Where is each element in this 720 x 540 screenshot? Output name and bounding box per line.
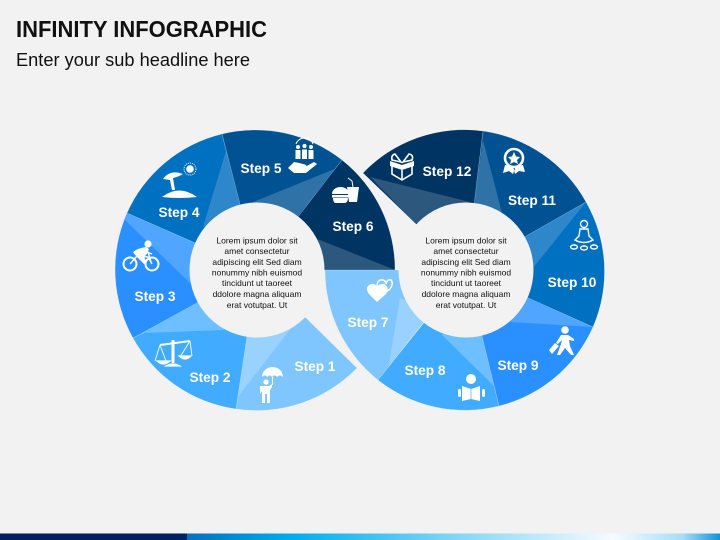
- segment: step 9: [466, 270, 593, 406]
- left ring segments: [115, 130, 395, 411]
- icon: people in hand: [288, 138, 317, 173]
- subtitle: Enter your sub headline here: [16, 50, 250, 70]
- segment: step 11: [466, 131, 586, 270]
- segment: step 1: [236, 270, 357, 411]
- segment: step 2: [133, 270, 257, 409]
- icon: umbrella person: [260, 367, 283, 403]
- segment: step 4: [127, 134, 257, 270]
- left body text: ddolore magna aliquam: [213, 289, 301, 299]
- left body text: [212, 236, 302, 310]
- step labels: Step 7: [347, 315, 389, 330]
- step labels: [134, 161, 597, 385]
- right body text: adipiscing elit Sed diam: [421, 257, 511, 267]
- icon: reader: [458, 374, 485, 401]
- left body text: adipiscing elit Sed diam: [212, 257, 302, 267]
- step labels: Step 5: [240, 161, 282, 176]
- right body text: tincidunt ut taoreet: [431, 278, 502, 288]
- step labels: Step 2: [189, 370, 231, 385]
- step labels: Step 6: [332, 219, 374, 234]
- title: INFINITY INFOGRAPHIC: [16, 16, 267, 42]
- segment: step 7: [325, 270, 466, 380]
- step labels: Step 9: [497, 358, 539, 373]
- step labels: Step 3: [134, 289, 176, 304]
- step labels: Step 8: [404, 363, 446, 378]
- step labels: Step 10: [548, 275, 597, 290]
- step labels: Step 1: [294, 359, 336, 374]
- icon: hearts: [367, 280, 392, 302]
- left body text: Lorem ipsum dolor sit: [216, 236, 298, 246]
- left body text: tincidunt ut taoreet: [222, 278, 293, 288]
- step labels: Step 11: [508, 193, 556, 208]
- right body text: Lorem ipsum dolor sit: [425, 236, 507, 246]
- step labels: Step 4: [158, 205, 200, 220]
- segment: step 10: [466, 202, 604, 327]
- icon: scales: [155, 340, 192, 366]
- icon: beach: [162, 163, 197, 198]
- right body text: erat votutpat. Ut: [436, 300, 497, 310]
- right ring segments: [325, 130, 604, 410]
- left body text: nonummy nibh euismod: [212, 268, 302, 278]
- right body text: amet consectetur: [433, 246, 499, 256]
- bottom bar: navy: [0, 534, 187, 540]
- right body text: [421, 236, 511, 310]
- icon: gift box: [390, 154, 414, 180]
- segment: step 5: [222, 130, 342, 270]
- segment: step 6: [257, 160, 395, 270]
- icon: meditating person: [570, 220, 598, 250]
- icon: award ribbon: [503, 149, 525, 174]
- left centre circle: [190, 202, 324, 338]
- right body text: nonummy nibh euismod: [421, 268, 511, 278]
- right body text: ddolore magna aliquam: [422, 289, 510, 299]
- segment: step 3: [115, 213, 257, 338]
- segment: step 8: [378, 270, 499, 410]
- icon: cyclist: [124, 240, 158, 270]
- right centre circle: [398, 202, 534, 338]
- step labels: Step 12: [423, 164, 472, 179]
- segment: step 12: [363, 130, 483, 270]
- icon: burger and drink: [332, 178, 359, 203]
- bottom bar: gradient: [187, 534, 720, 540]
- icon: traveller: [549, 326, 574, 355]
- left body text: erat votutpat. Ut: [227, 300, 288, 310]
- left body text: amet consectetur: [224, 246, 290, 256]
